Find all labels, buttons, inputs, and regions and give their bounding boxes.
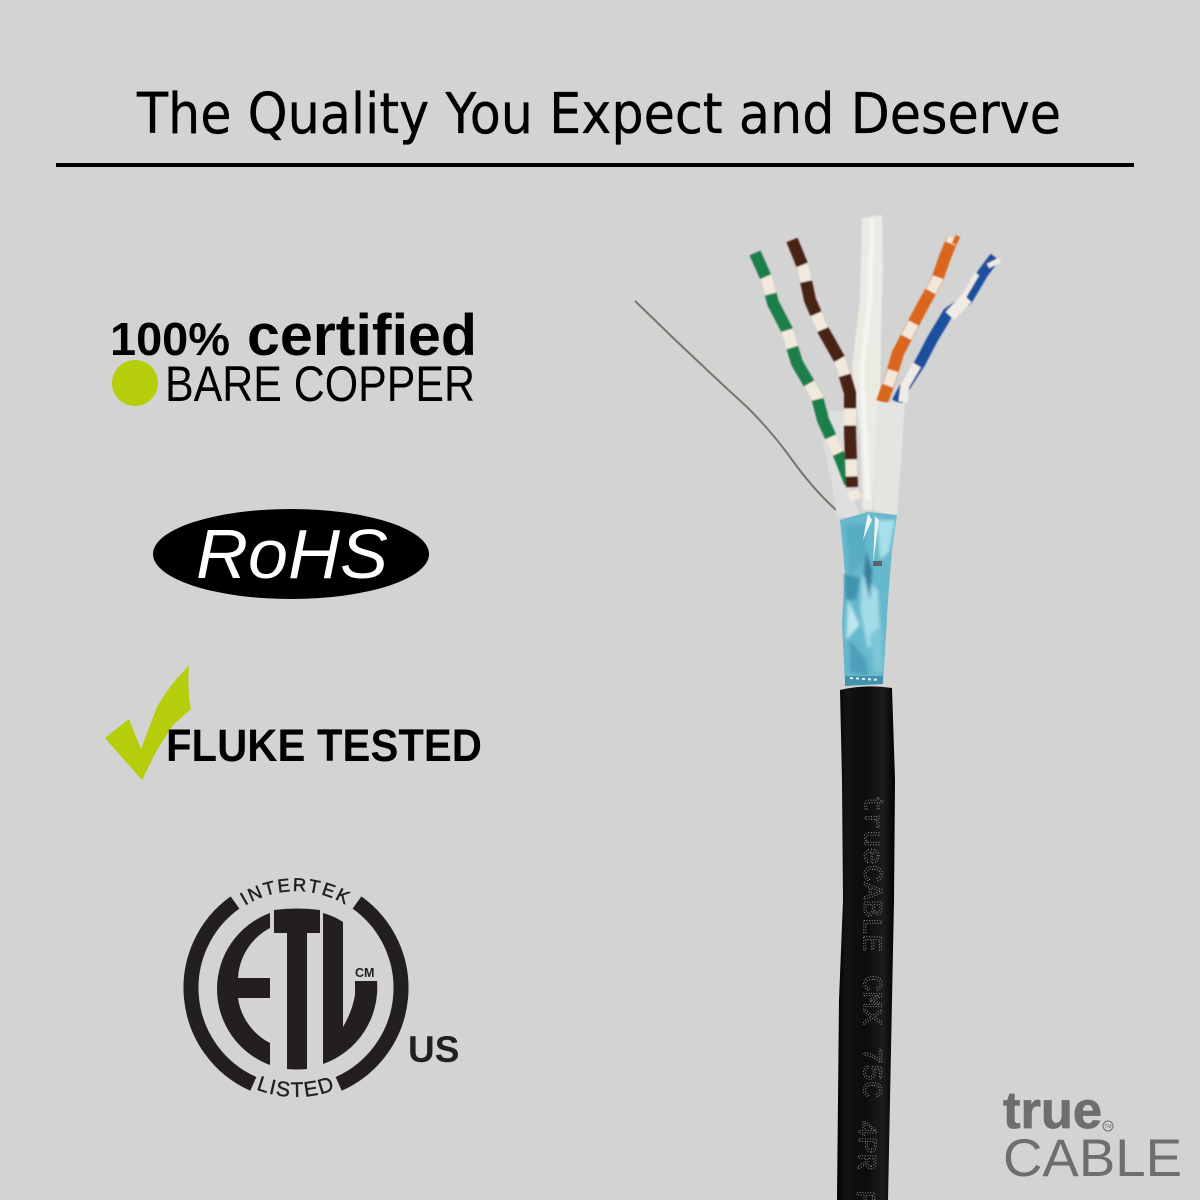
trademark symbol	[1103, 1121, 1113, 1131]
cable print text: 4PR	[849, 1120, 880, 1170]
wordmark: true: true	[1003, 1082, 1102, 1140]
badge: RoHS	[153, 509, 429, 599]
icon: green check mark	[105, 666, 191, 780]
logo: trueCABLE	[1003, 1082, 1182, 1188]
cable print text	[848, 795, 886, 1200]
trademark symbol: TM	[1104, 1124, 1112, 1130]
letter L	[323, 913, 377, 1064]
foil tape right	[873, 402, 905, 517]
orange twisted pair	[882, 236, 958, 402]
wordmark: CABLE: CABLE	[1003, 1129, 1182, 1188]
green twisted pair	[755, 253, 856, 500]
cable print text: trueCABLE	[855, 795, 886, 952]
icon: green dot	[112, 360, 158, 406]
text: fluke tested: FLUKE TESTED	[166, 720, 482, 771]
letter E	[217, 913, 270, 1065]
title: The Quality You Expect and Deserve	[136, 82, 1061, 147]
outer ring right arc	[339, 902, 401, 1084]
cable print text: CMX	[855, 975, 885, 1025]
letter T	[274, 908, 320, 1070]
logo: ETL listed	[183, 878, 459, 1098]
foil tape left	[823, 410, 860, 517]
text: Intertek: INTERTEK	[240, 878, 351, 906]
RoHS ellipse	[153, 509, 429, 599]
cable print text: 75C	[855, 1047, 885, 1098]
drain wire	[635, 301, 836, 510]
badge: 100% certified bare copper	[110, 303, 477, 412]
blue foil shield	[840, 512, 897, 686]
badge: Fluke tested	[105, 666, 482, 780]
text: Listed: LISTED	[257, 1076, 332, 1098]
text: bare copper: BARE COPPER	[165, 356, 475, 412]
text: certified: certified	[247, 303, 477, 368]
RoHS text: RoHS	[196, 515, 388, 593]
CM mark: CM	[355, 966, 374, 980]
text: US: US	[408, 1029, 459, 1070]
illustration: stripped shielded cable	[635, 215, 1000, 1200]
white filler spline	[852, 215, 883, 510]
black cable jacket	[837, 686, 895, 1200]
title underline	[56, 163, 1134, 167]
blue twisted pair	[897, 257, 1000, 402]
brown twisted pair	[792, 240, 856, 500]
outer ring left arc	[191, 902, 253, 1084]
text: 100%: 100%	[110, 313, 230, 365]
